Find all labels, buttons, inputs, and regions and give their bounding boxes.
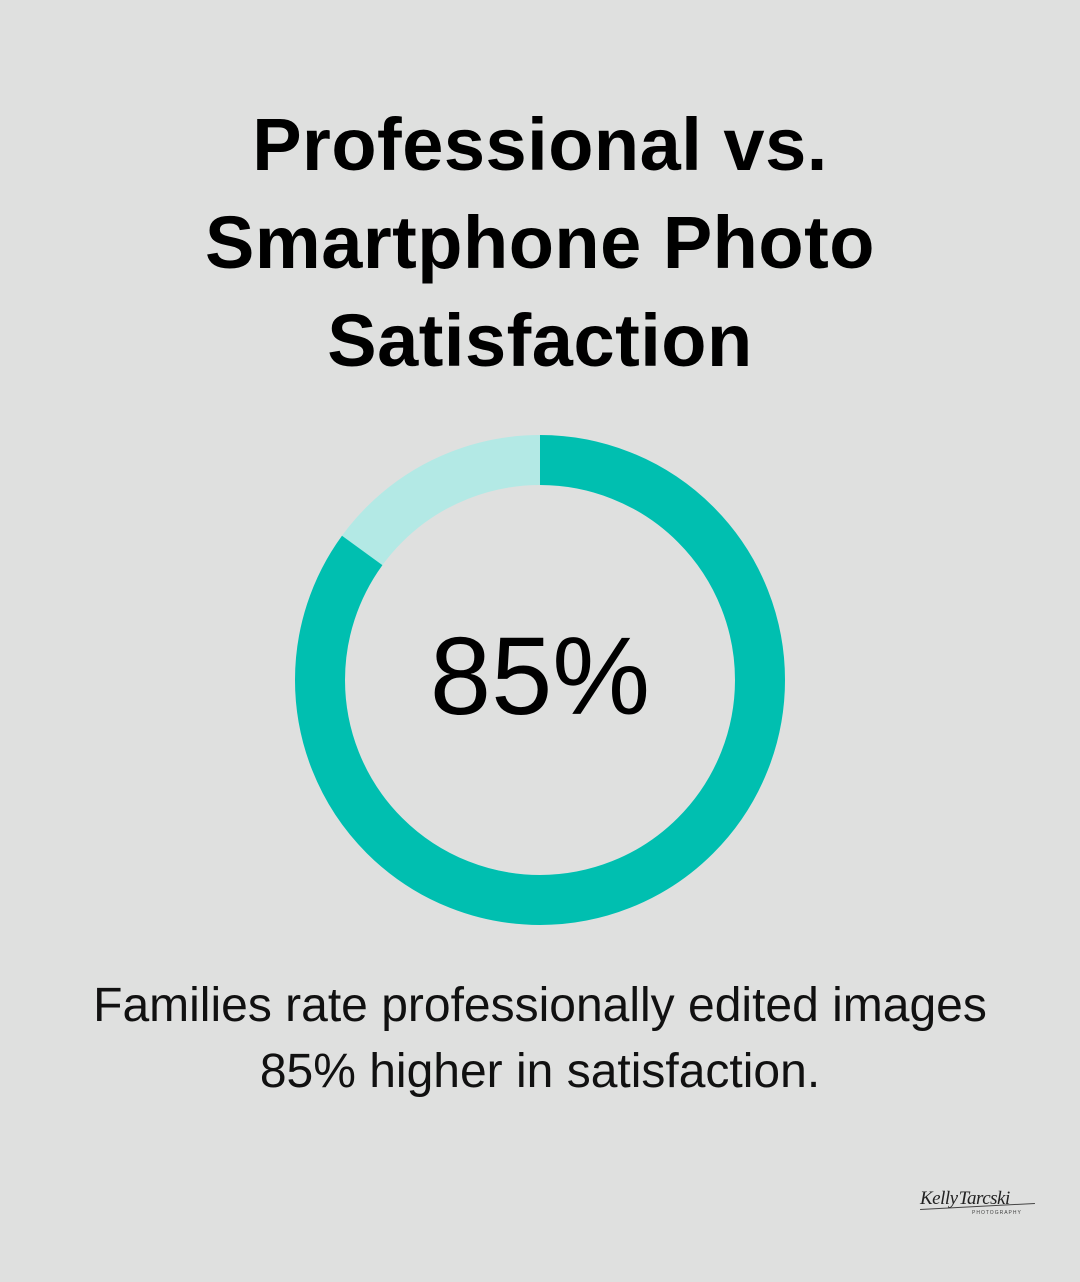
center value: 85%: [430, 615, 650, 738]
title: [205, 103, 875, 382]
description text: Families rate professionally edited images: [93, 979, 987, 1032]
title: Smartphone Photo: [205, 201, 875, 284]
logo: signature: Kelly Tarcski: [920, 1188, 1010, 1209]
85% segment: [320, 460, 760, 900]
title: Satisfaction: [327, 299, 753, 382]
remainder segment: [320, 460, 760, 900]
description text: 85% higher in satisfaction.: [260, 1045, 820, 1098]
title: Professional vs.: [252, 103, 828, 186]
logo: signature: [920, 1188, 1035, 1216]
logo: signature: PHOTOGRAPHY: [972, 1210, 1022, 1216]
description text: [93, 979, 987, 1098]
